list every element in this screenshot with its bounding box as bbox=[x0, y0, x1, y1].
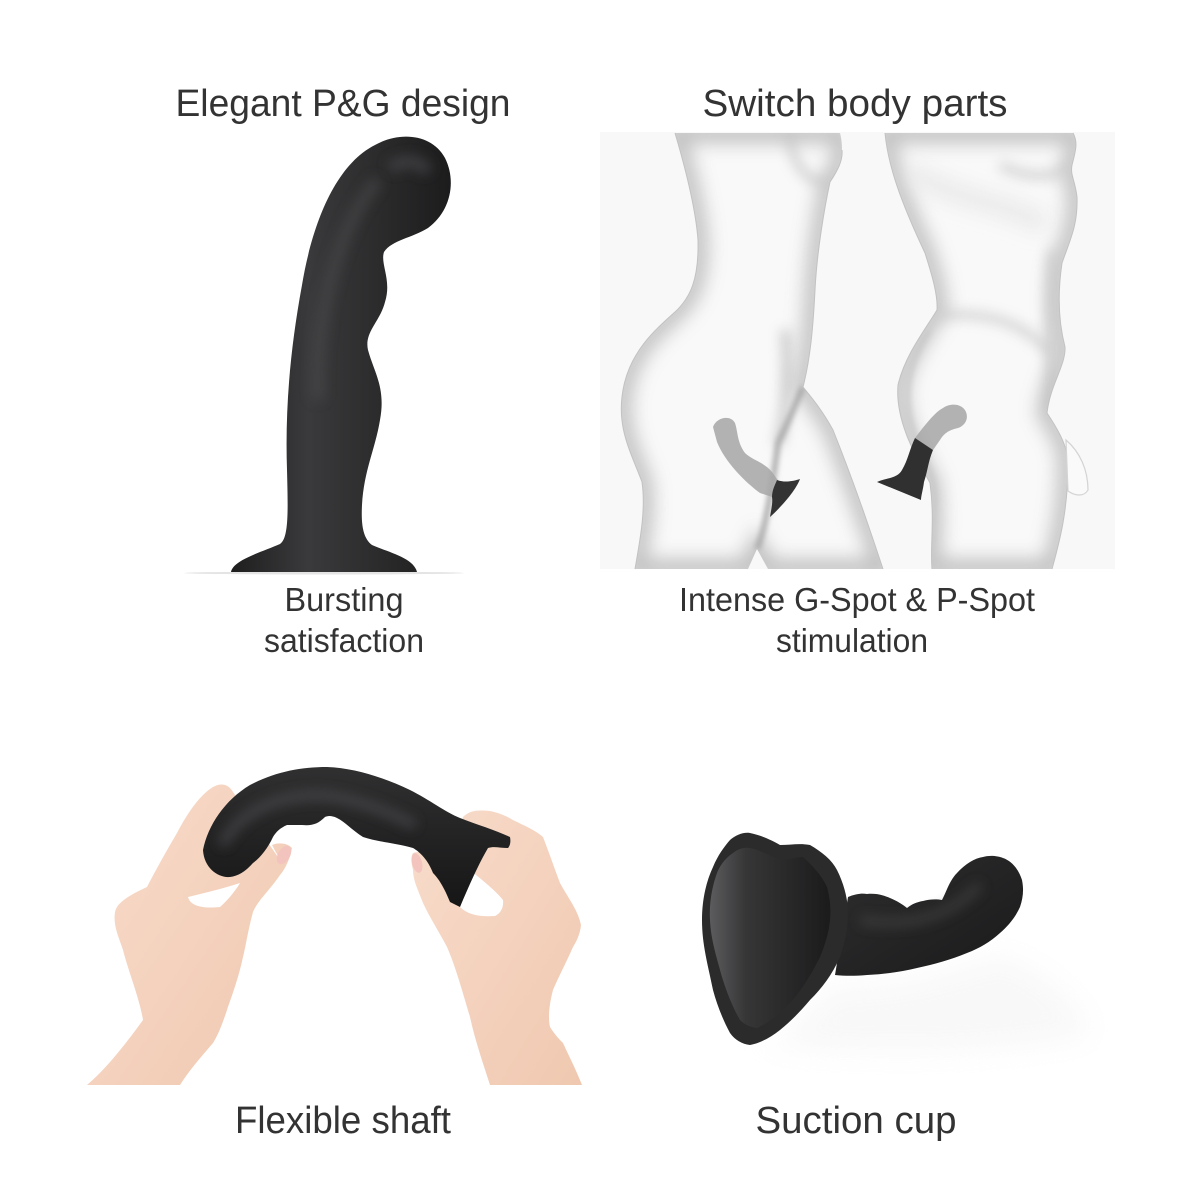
soft shadow bbox=[690, 955, 1090, 1051]
right hand bbox=[410, 811, 582, 1085]
heart inner cup bbox=[710, 848, 830, 1028]
caption: Intense G-Spot & P-Spot stimulation: stimulation bbox=[776, 622, 928, 659]
thumbnail bbox=[274, 843, 294, 867]
flexed product bbox=[203, 767, 510, 907]
panel: upright product bbox=[184, 137, 464, 574]
panel: suction cup product bbox=[690, 833, 1090, 1051]
female figure bbox=[621, 130, 883, 569]
male figure bbox=[885, 133, 1077, 569]
heading: Switch body parts: Switch body parts bbox=[702, 83, 1008, 125]
hand gap bbox=[188, 883, 240, 908]
caption: Flexible shaft: Flexible shaft bbox=[235, 1100, 451, 1142]
icon: product in male figure bbox=[877, 405, 967, 500]
caption: Suction cup: Suction cup bbox=[756, 1100, 956, 1142]
caption: Bursting satisfaction: Bursting bbox=[284, 581, 404, 618]
heart-shaped base bbox=[702, 833, 848, 1045]
hand gap bbox=[460, 870, 503, 916]
product shaft bbox=[835, 856, 1023, 976]
caption: Bursting satisfaction bbox=[264, 581, 424, 659]
caption: Intense G-Spot & P-Spot stimulation bbox=[679, 581, 1035, 659]
infographic canvas bbox=[87, 88, 1089, 1141]
caption: Bursting satisfaction: satisfaction bbox=[264, 622, 424, 659]
icon: product in female figure bbox=[713, 418, 800, 517]
heading: Elegant P&G design: Elegant P&G design bbox=[176, 83, 510, 125]
left hand bbox=[87, 784, 294, 1085]
caption: Intense G-Spot & P-Spot stimulation: Intense G-Spot & P-Spot bbox=[679, 581, 1035, 618]
panel: flexible shaft with hands bbox=[87, 767, 582, 1085]
male figure detail bbox=[1066, 440, 1088, 495]
thumbnail bbox=[410, 852, 424, 874]
panel: body parts illustration bbox=[600, 130, 1115, 569]
